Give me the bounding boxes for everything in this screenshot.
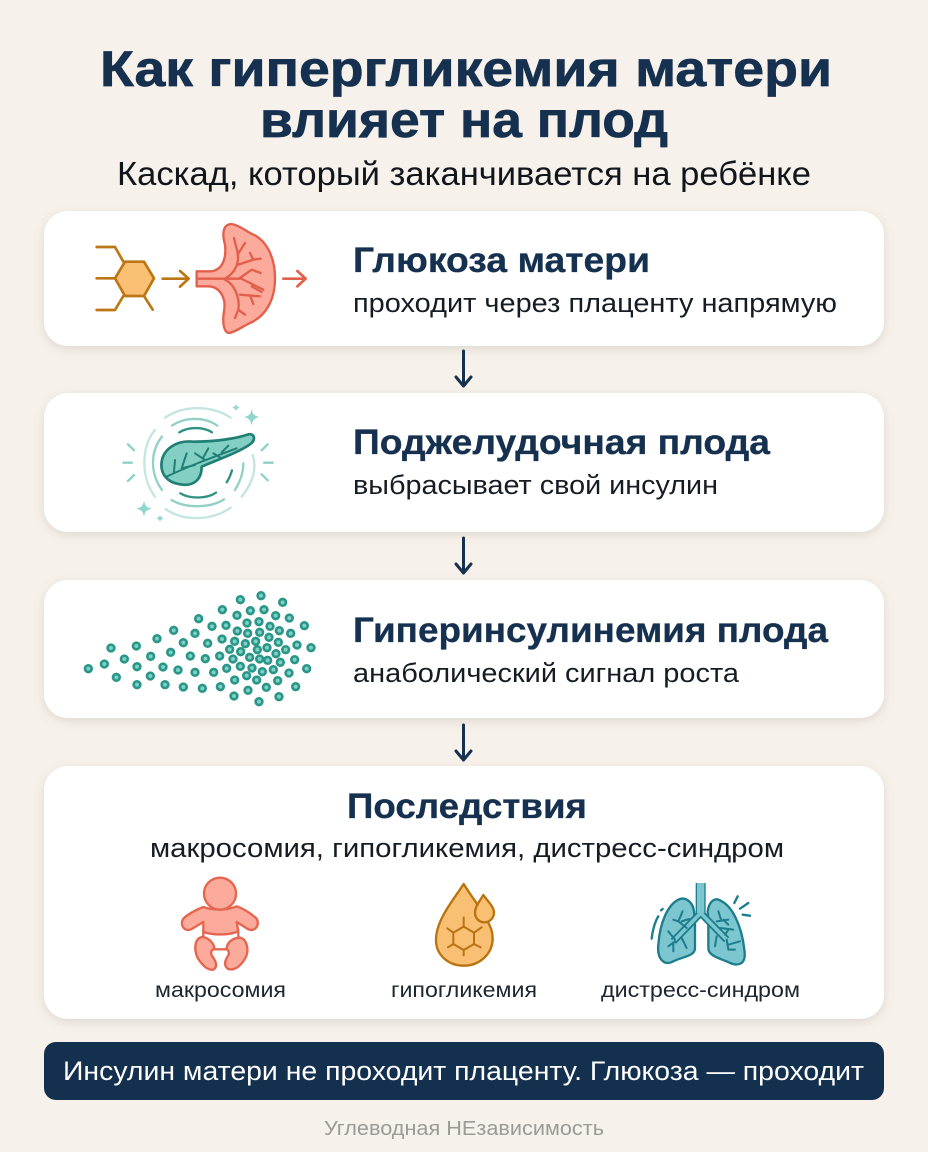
subtitle: Каскад, который заканчивается на ребёнке [117, 155, 811, 192]
description: анаболический сигнал роста [353, 658, 740, 688]
icon: lungs [652, 883, 750, 964]
arrow [456, 351, 471, 386]
description: проходит через плаценту напрямую [353, 288, 837, 318]
icon: glucose drop [436, 884, 494, 966]
footer credit: Углеводная НЕзависимость [324, 1118, 604, 1140]
title [100, 41, 832, 148]
label: гипогликемия [391, 979, 537, 1002]
icon: placenta [197, 224, 275, 333]
panel: consequences [44, 766, 884, 1019]
label: дистресс-синдром [601, 979, 800, 1002]
panel: fetal hyperinsulinemia [44, 580, 884, 718]
icon: baby [182, 878, 258, 970]
icon: pancreas [161, 434, 254, 485]
heading: Поджелудочная плода [353, 423, 771, 462]
icon: glucose molecule [97, 247, 189, 310]
description: выбрасывает свой инсулин [353, 470, 718, 500]
callout: Инсулин матери не проходит плаценту. Глюкоза — проходит [63, 1056, 864, 1086]
callout [44, 1042, 884, 1100]
title: Как гипергликемия матери [100, 41, 832, 97]
panel: maternal glucose [44, 211, 884, 346]
heading: Глюкоза матери [353, 241, 650, 280]
label: макросомия [155, 979, 286, 1002]
icon: output arrow [283, 271, 306, 286]
arrow [456, 725, 471, 760]
panel: fetal pancreas [44, 393, 884, 532]
description: макросомия, гипогликемия, дистресс-синдром [150, 833, 784, 863]
arrow [456, 538, 471, 573]
heading: Гиперинсулинемия плода [353, 611, 829, 650]
icon: insulin particle cloud [85, 592, 314, 705]
icon: signal waves [123, 404, 273, 522]
heading: Последствия [347, 787, 587, 826]
title: влияет на плод [260, 92, 668, 148]
